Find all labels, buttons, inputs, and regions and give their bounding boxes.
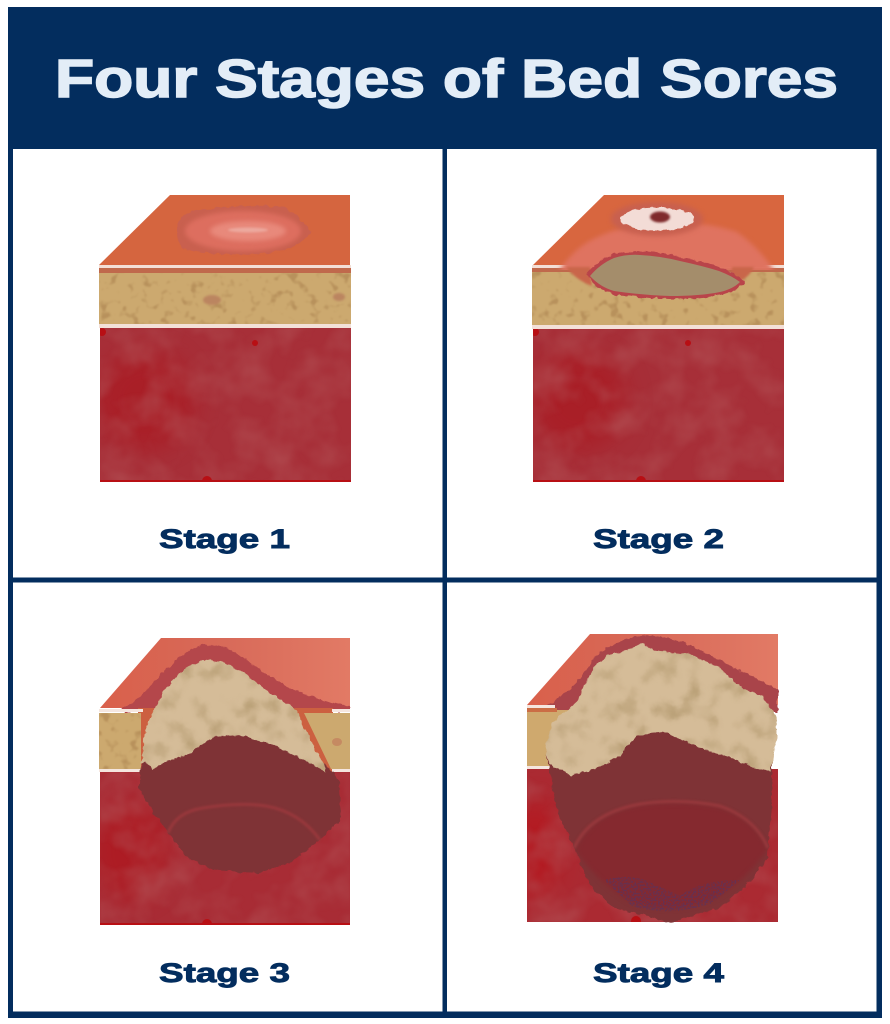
blister	[586, 251, 745, 299]
crater	[138, 728, 340, 873]
title: Four Stages of Bed Sores	[55, 49, 838, 109]
panel: stage 4	[510, 634, 778, 988]
label: stage 3: Stage 3	[159, 958, 290, 988]
muscle layer	[90, 772, 350, 929]
dark wound margin	[545, 636, 778, 712]
skin surface	[527, 634, 778, 705]
slough	[545, 643, 777, 775]
inflamed halo	[558, 223, 775, 272]
fat layer, left and right	[99, 713, 350, 769]
illustration: stage 2 skin cross-section	[528, 195, 784, 486]
dark wound margin	[122, 645, 350, 712]
illustration: stage 3 skin cross-section	[90, 638, 350, 929]
skin divider line	[532, 325, 784, 329]
wound wall	[138, 708, 333, 772]
label: stage 1: Stage 1	[159, 524, 290, 554]
panel: stage 2	[528, 195, 784, 554]
fat layer	[532, 268, 784, 325]
label: stage 4: Stage 4	[593, 958, 724, 988]
skin divider line	[532, 265, 784, 268]
crater	[546, 720, 772, 922]
skin surface	[533, 195, 784, 265]
illustration: stage 4 skin cross-section	[510, 634, 778, 926]
skin surface	[99, 195, 350, 265]
illustration: stage 1 skin cross-section	[95, 195, 351, 486]
muscle layer	[95, 328, 351, 486]
sore: reddened patch	[177, 206, 311, 254]
muscle layer	[528, 328, 784, 486]
skin divider lines	[99, 709, 350, 772]
muscle layer	[510, 769, 778, 926]
panel: stage 1	[95, 195, 351, 554]
slough	[142, 660, 327, 772]
skin surface	[100, 638, 350, 708]
fat layer	[99, 268, 351, 324]
label: stage 2: Stage 2	[593, 524, 724, 554]
wound shoulders	[566, 267, 754, 286]
fat layer, left	[527, 705, 570, 769]
panel: stage 3	[90, 638, 350, 988]
open sore on the surface	[611, 202, 703, 236]
skin divider lines	[99, 265, 351, 328]
